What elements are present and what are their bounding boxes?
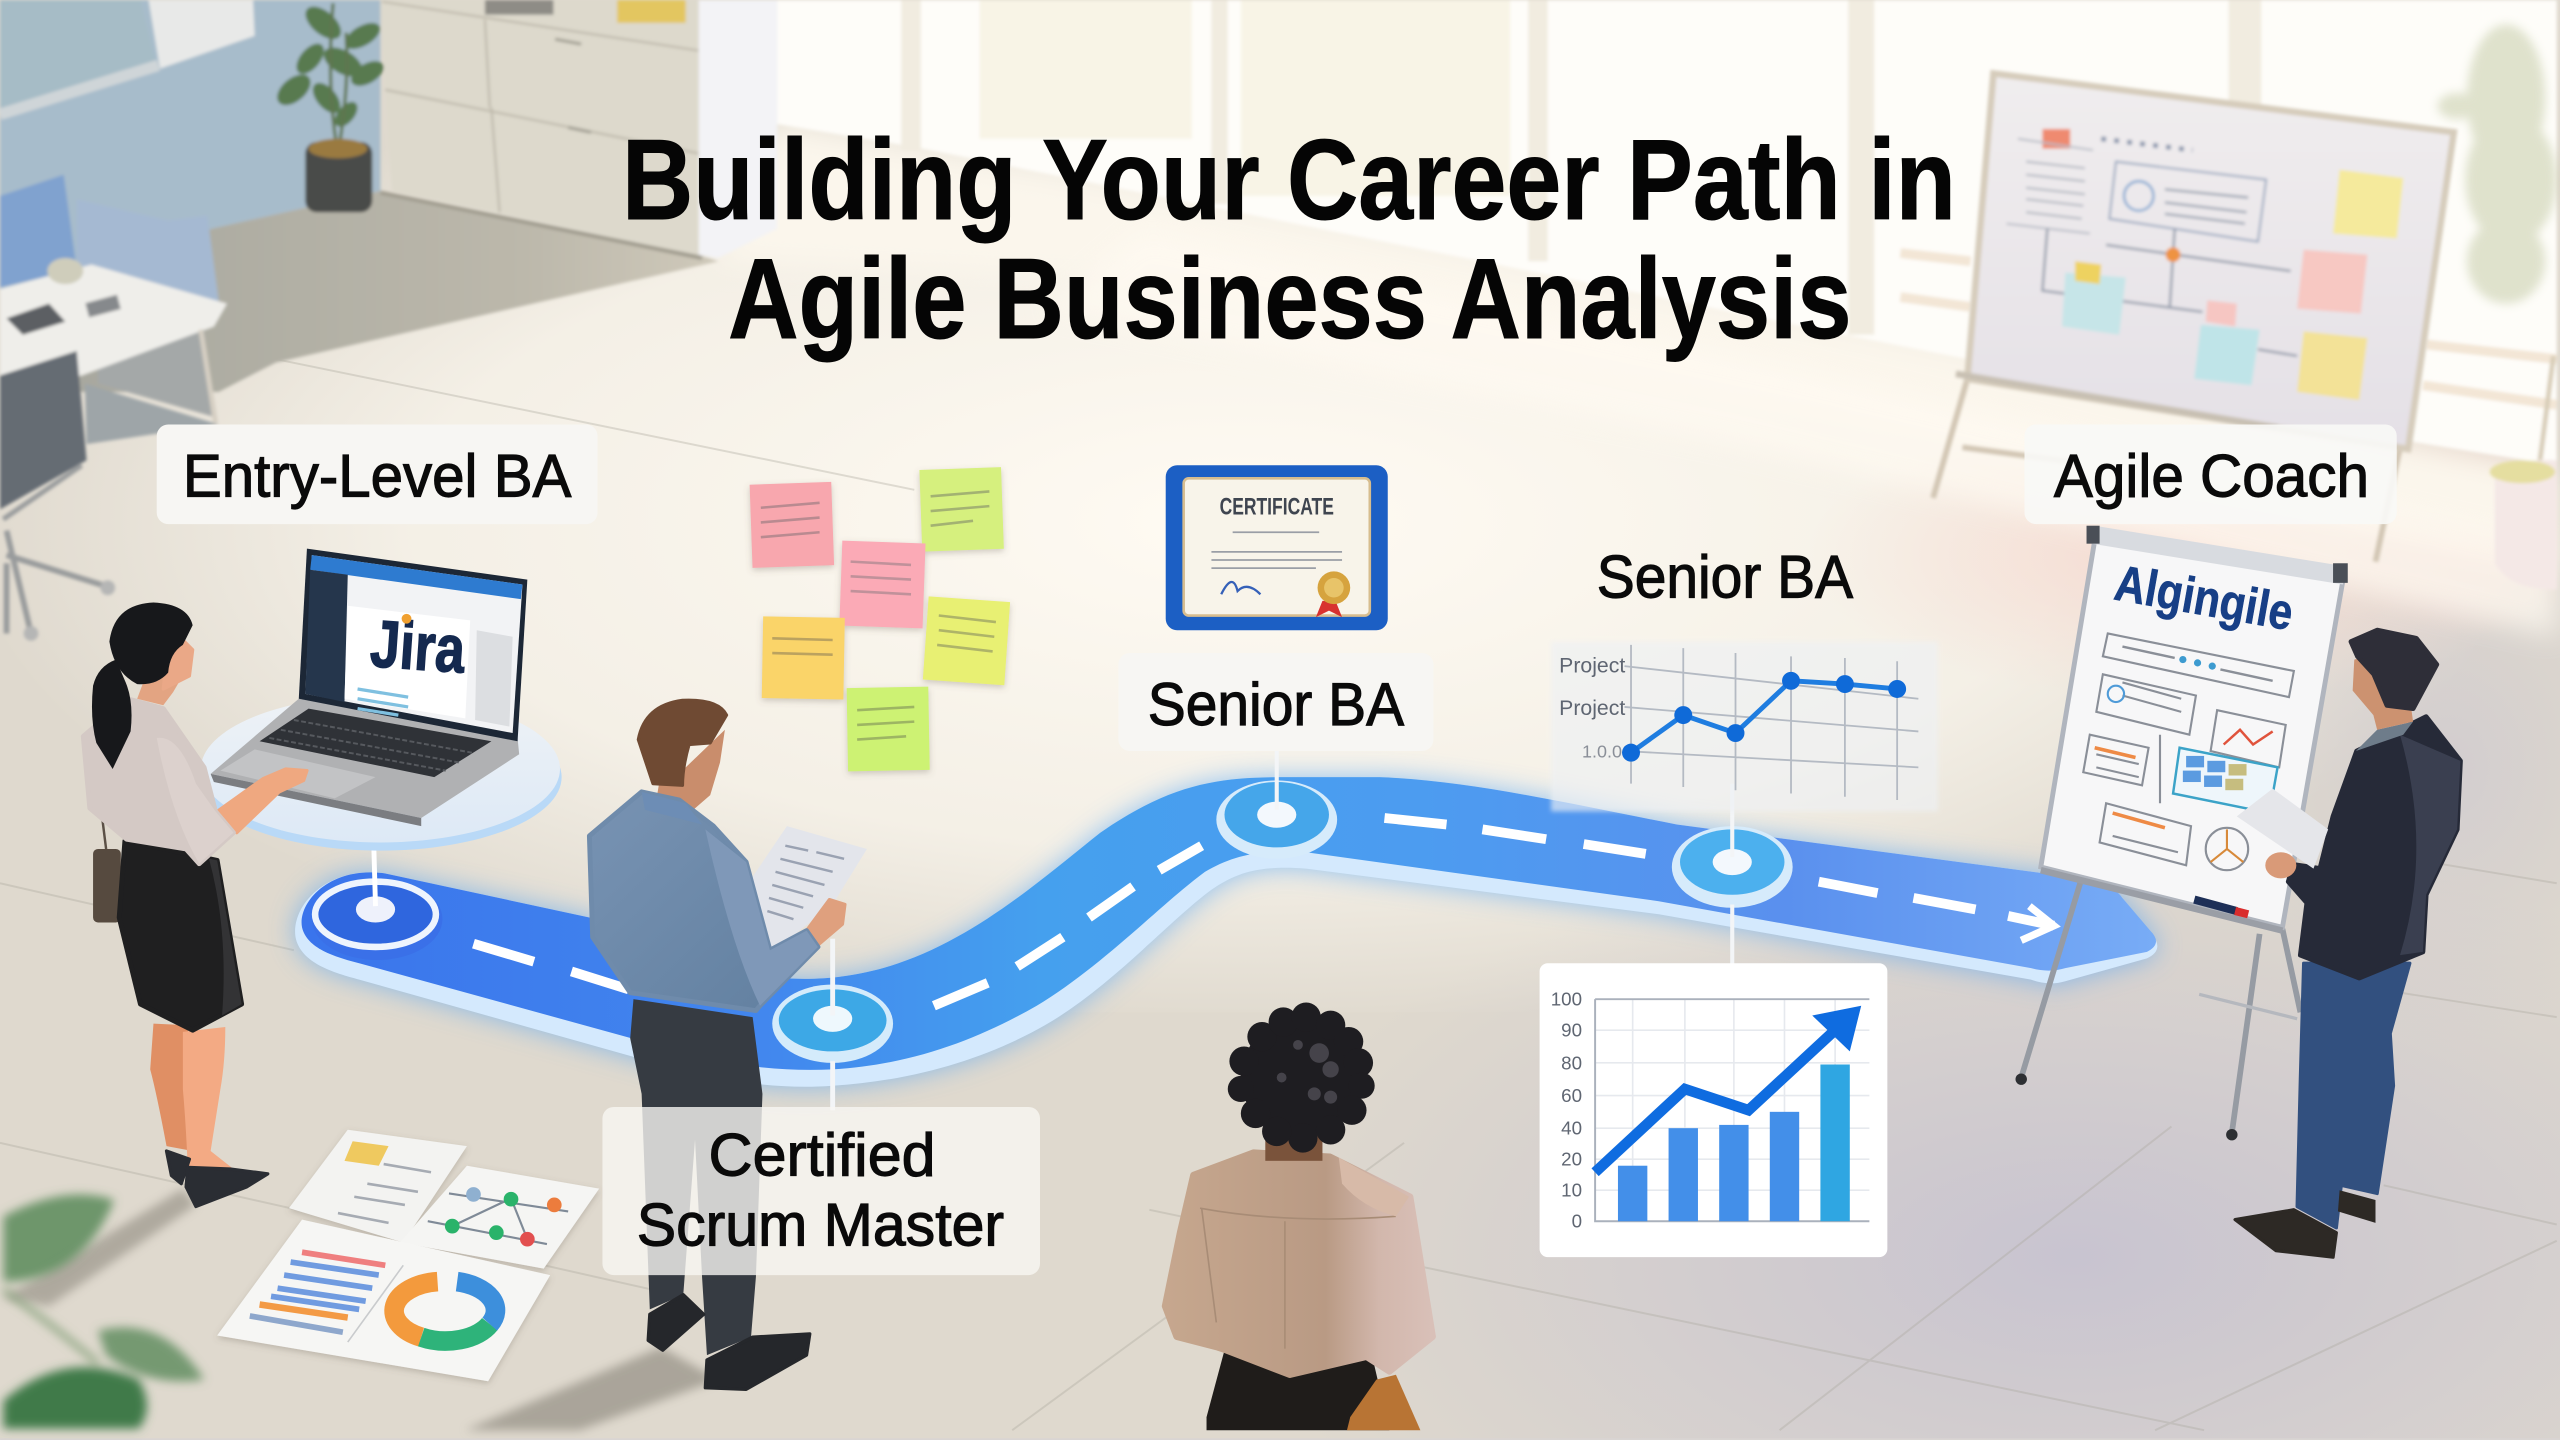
lane dashes — [473, 818, 2054, 1006]
blouse — [83, 699, 233, 864]
hair — [2351, 630, 2437, 709]
trend arrow — [1595, 1029, 1837, 1172]
handbag — [1347, 1375, 1420, 1430]
label: Agile Coach — [2024, 424, 2397, 524]
label: Certified Scrum Master — [602, 1107, 1040, 1275]
milestone node 2 — [772, 939, 893, 1110]
shirt — [589, 792, 818, 1011]
sunlit floor band — [718, 124, 2557, 563]
heels — [167, 1151, 189, 1184]
text sheet — [289, 1130, 467, 1242]
green note — [847, 687, 930, 771]
forearm and hand — [217, 769, 307, 833]
under-desk shadow — [85, 384, 219, 444]
yellow note — [923, 596, 1010, 685]
ponytail — [92, 660, 132, 769]
bars — [1618, 1112, 1799, 1221]
person: woman at laptop — [3, 602, 307, 1306]
gray floor near wall — [77, 191, 718, 392]
flipchart — [2016, 526, 2348, 1140]
floor documents — [217, 1130, 599, 1381]
person: man at flipchart — [2235, 630, 2460, 1257]
grid — [1595, 999, 1869, 1221]
diagram boxes — [2083, 633, 2294, 870]
collar — [2356, 722, 2413, 751]
neck — [1265, 1135, 1322, 1161]
line chart panel: Project — [1559, 697, 1625, 720]
neck — [137, 673, 184, 705]
trousers — [630, 999, 762, 1355]
blue chair backs — [77, 199, 219, 302]
neck and face — [2353, 653, 2413, 730]
dark chair — [0, 351, 87, 509]
label: Entry-Level BA: Entry-Level BA — [183, 441, 572, 509]
axis labels: 90 — [1561, 1020, 1582, 1041]
jacket — [2288, 717, 2460, 978]
line chart panel: Project — [1559, 655, 1625, 678]
pale plant at right — [2438, 24, 2557, 304]
axis labels: 20 — [1561, 1149, 1582, 1170]
line chart panel: 1.0.0 — [1582, 742, 1622, 762]
plant in pot — [272, 0, 388, 131]
easel legs — [2021, 878, 2300, 1133]
desk — [0, 264, 227, 395]
shoes — [2235, 1210, 2336, 1257]
paper and hand — [2237, 789, 2328, 869]
floor shadow — [3, 1189, 196, 1306]
career road path — [295, 777, 2157, 1087]
axis labels: 80 — [1561, 1052, 1582, 1073]
laptop on round platform — [199, 549, 562, 851]
hair — [109, 602, 193, 684]
wall poster — [149, 0, 255, 69]
donut report sheet — [217, 1220, 550, 1381]
board — [2041, 531, 2344, 927]
hair — [638, 700, 727, 785]
axis labels: 40 — [1561, 1118, 1582, 1139]
title: Agile Business Analysis — [728, 236, 1851, 363]
green note — [919, 467, 1004, 552]
hand — [807, 900, 845, 944]
floor tile lines — [0, 359, 2557, 1430]
bar and trend chart card — [1540, 963, 1887, 1257]
label: Entry-Level BA — [157, 424, 598, 524]
laptop base — [211, 699, 519, 818]
handbag — [93, 849, 121, 922]
room back elements, soft focus — [0, 0, 2557, 641]
label: Certified Scrum Master: Certified — [709, 1121, 936, 1189]
curly hair — [1228, 1002, 1375, 1153]
axis labels: 0 — [1572, 1211, 1582, 1232]
milestone node 1 — [312, 849, 442, 960]
floor shadow — [465, 1347, 718, 1430]
label: Senior BA on pin — [1118, 653, 1433, 751]
whiteboard with process diagram — [1933, 73, 2454, 562]
arrow head on road — [2021, 906, 2054, 940]
label: Agile Coach: Agile Coach — [2054, 441, 2369, 509]
blouse — [1165, 1153, 1433, 1375]
certificate icon: CERTIFICATE — [1220, 494, 1334, 520]
milestone node 4 — [1672, 784, 1793, 967]
window sills, pale peach — [1900, 253, 2557, 405]
pot at right — [2539, 356, 2553, 470]
label: Certified Scrum Master: Scrum Master — [637, 1191, 1004, 1259]
neck and face — [656, 730, 725, 816]
orange note — [762, 616, 845, 699]
axis labels: 100 — [1551, 989, 1582, 1010]
shoes — [648, 1295, 704, 1350]
donut chart — [394, 1282, 495, 1341]
pink note — [750, 482, 834, 568]
pink note — [839, 541, 926, 628]
axis labels — [1551, 989, 1582, 1232]
blue wall — [0, 0, 380, 294]
face — [163, 627, 193, 689]
windows — [777, 0, 2557, 465]
label: Senior BA above chart: Senior BA — [1597, 543, 1854, 611]
milestone node 3 — [1216, 751, 1337, 859]
wall mirror panel — [0, 0, 155, 109]
brand word: Algingile — [2111, 554, 2298, 641]
sticky notes cluster — [750, 467, 1010, 771]
line chart panel — [1551, 642, 1938, 811]
axis labels: 10 — [1561, 1180, 1582, 1201]
legs — [150, 1024, 193, 1151]
platform — [199, 696, 562, 851]
trousers — [2297, 963, 2410, 1228]
title: Building Your Career Path in — [622, 117, 1956, 244]
label: Senior BA on pin: Senior BA — [1148, 670, 1405, 738]
title — [622, 117, 1956, 363]
jira logo: Jira — [368, 606, 468, 688]
cabinet end column — [699, 0, 777, 258]
document — [753, 826, 867, 953]
skirt — [119, 841, 242, 1030]
laptop screen — [299, 549, 527, 741]
foreground plant leaves — [3, 1195, 204, 1429]
axis labels: 60 — [1561, 1085, 1582, 1106]
network chart sheet — [400, 1166, 599, 1269]
skirt — [1207, 1350, 1389, 1430]
cabinets — [380, 0, 699, 255]
person: woman seen from behind — [1165, 1002, 1433, 1430]
person: man with document — [465, 700, 867, 1430]
certificate icon — [1166, 465, 1388, 630]
